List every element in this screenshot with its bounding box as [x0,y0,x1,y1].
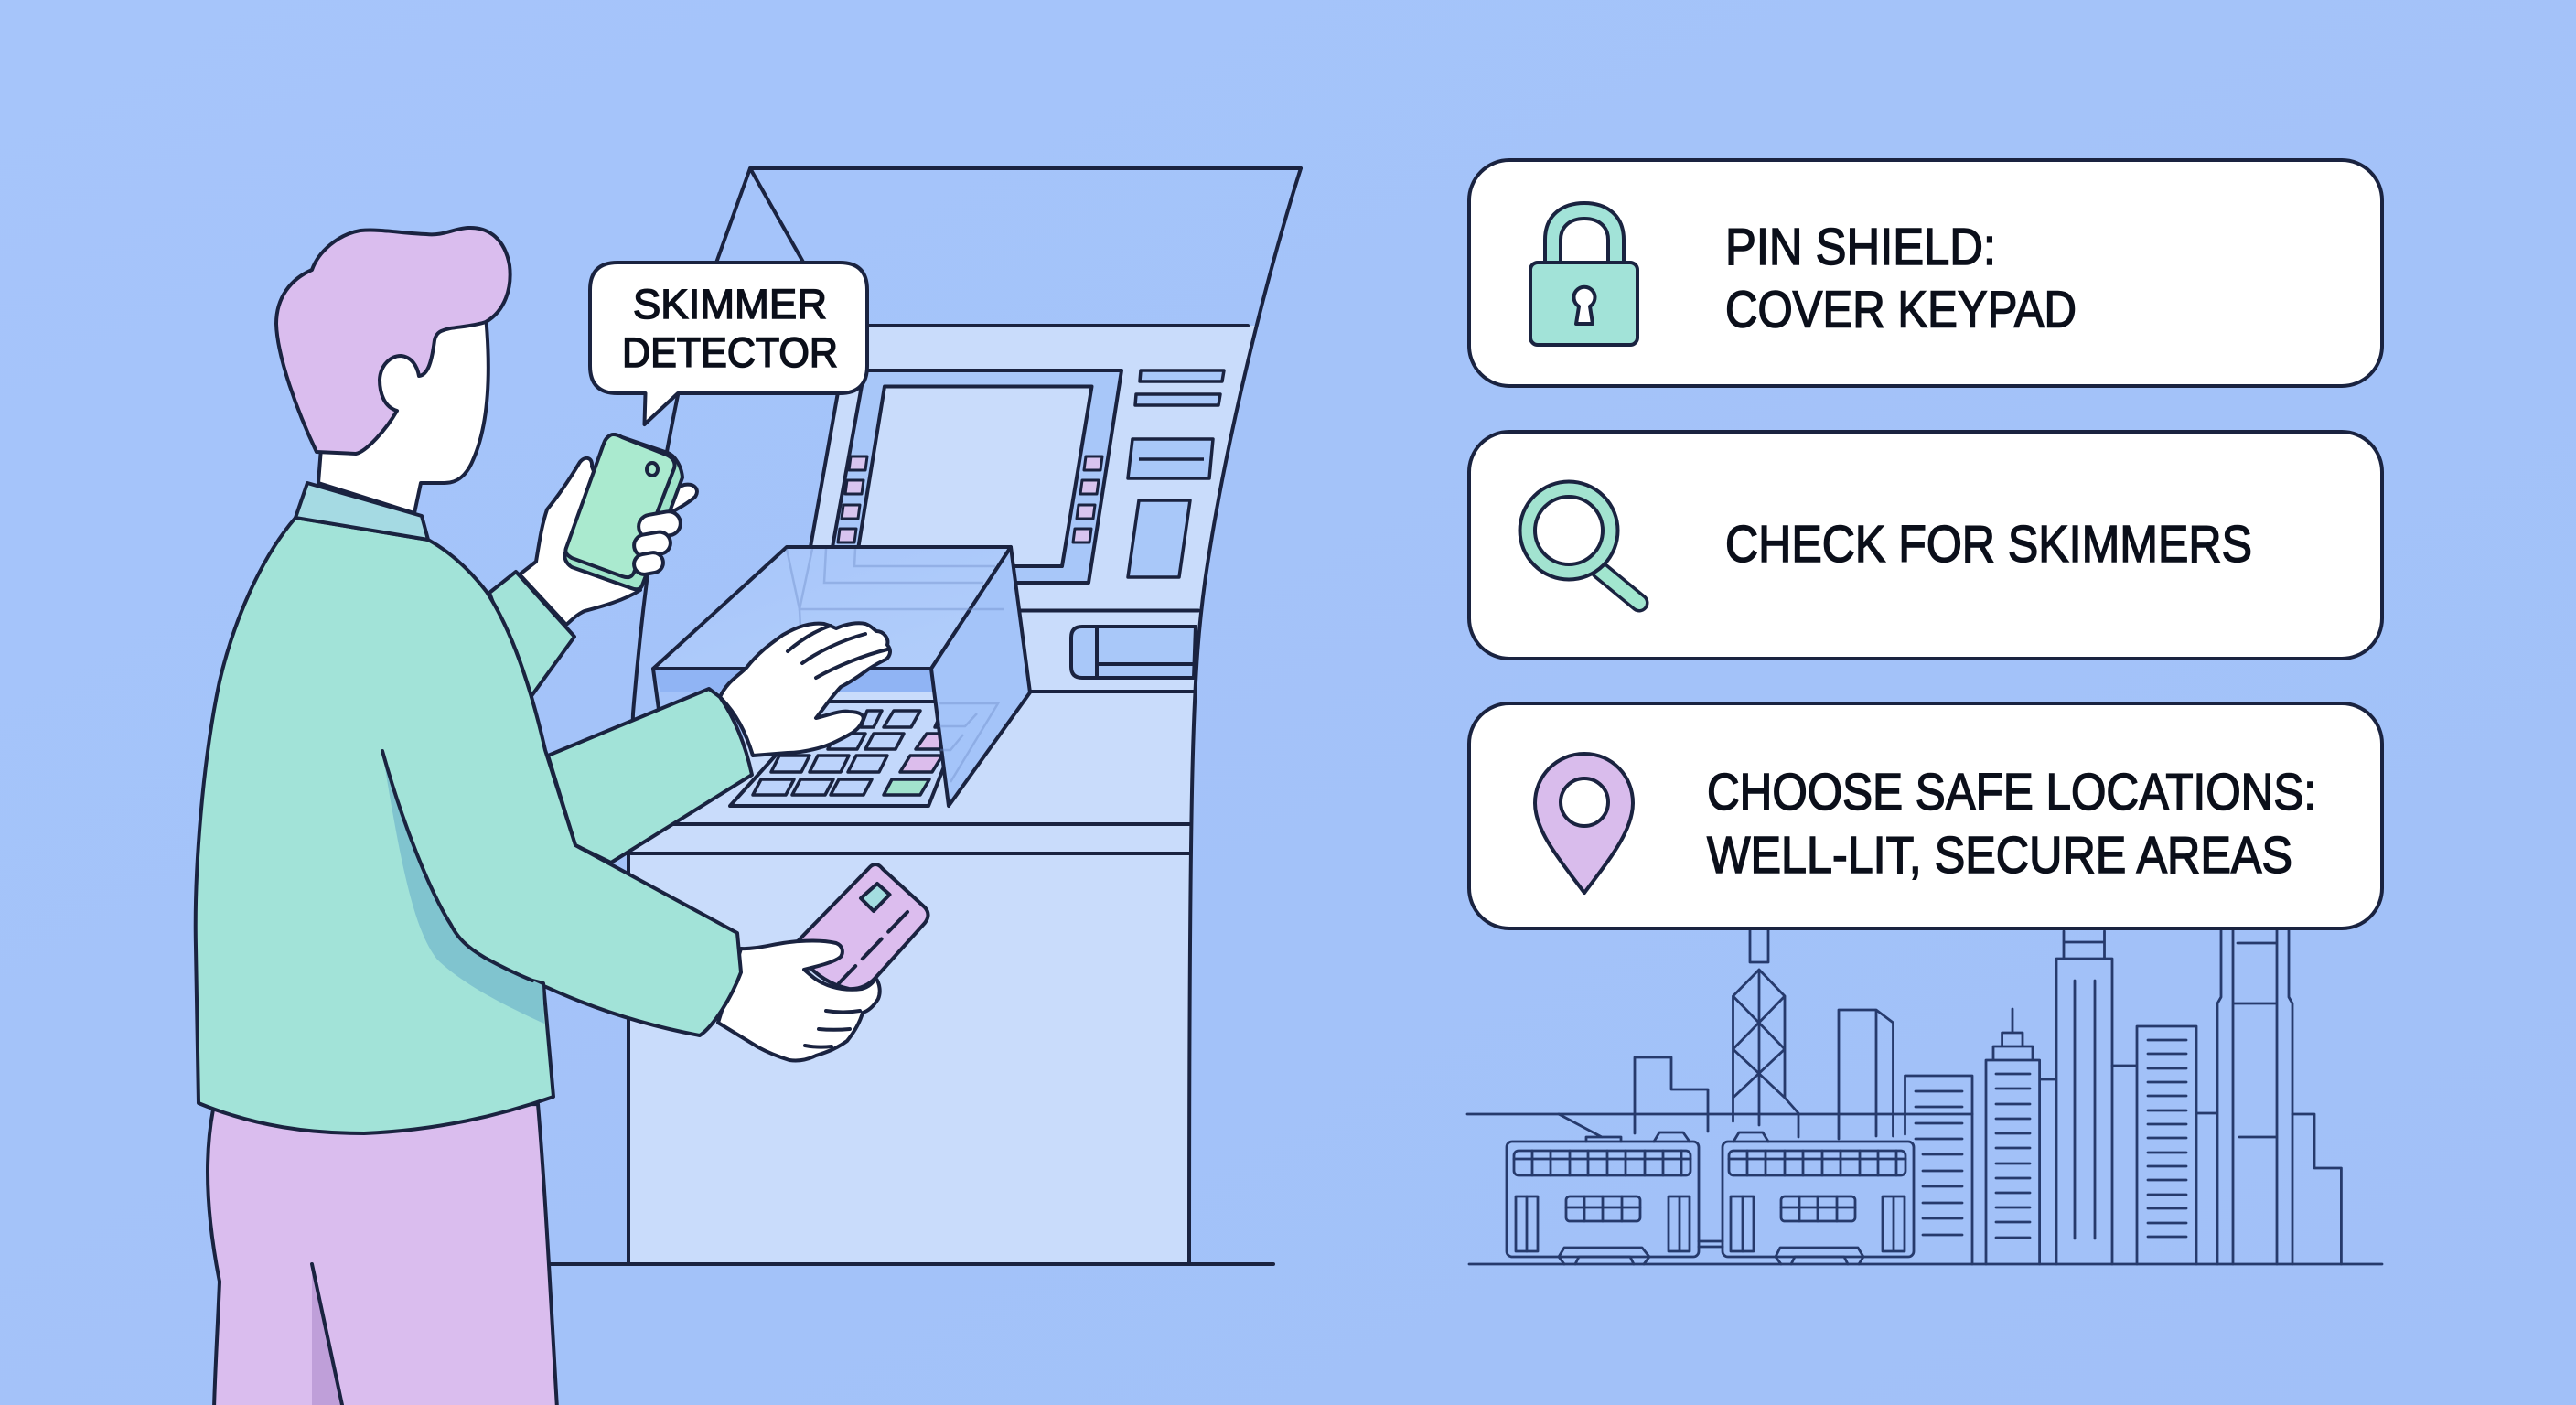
keypad [730,702,970,806]
card and receipt slots [1128,370,1224,577]
skyline [1467,928,2382,1264]
bubble label: SKIMMER [633,281,827,327]
bubble label [622,281,838,376]
text: PIN shield [1725,218,2077,338]
floor line [549,1262,1273,1266]
buildings [1467,928,2382,1264]
phone hand fingers [632,509,682,576]
text: safe locations: WELL-LIT, SECURE AREAS [1707,826,2292,885]
phone [564,434,682,589]
bank card [798,864,928,989]
icon: map pin [1535,754,1633,893]
keypad hand [720,623,890,756]
collar [295,483,428,540]
ATM machine [549,168,1301,1264]
ATM screen [826,370,1122,583]
hair [276,228,510,454]
bubble label: DETECTOR [622,329,838,376]
text: check for skimmers: CHECK FOR SKIMMERS [1725,515,2252,574]
card: PIN shield [1469,160,2382,386]
person [196,228,928,1405]
cash dispenser [1071,627,1196,678]
text: safe locations: CHOOSE SAFE LOCATIONS: [1707,763,2316,821]
phone arm sleeve [489,572,574,700]
text: PIN shield: PIN SHIELD: [1725,218,1996,276]
face and neck [318,274,488,513]
phone hand [520,458,697,625]
card: safe locations [1469,703,2382,928]
ATM body [628,168,1301,1263]
card hand [718,941,880,1060]
icon: magnifier [1520,481,1639,603]
PIN shield [653,547,1030,806]
side buttons [838,456,1102,542]
icon: padlock [1530,203,1637,345]
keypad arm sleeve [548,689,752,863]
speech bubble [590,263,867,424]
text: safe locations [1707,763,2316,885]
ATM hood outline [628,168,1301,860]
sweater [196,518,741,1133]
tram 2 [1699,1132,1914,1264]
tram 1 [1507,1114,1699,1264]
card: check for skimmers [1469,432,2382,659]
trousers [208,1104,557,1405]
text: PIN shield: COVER KEYPAD [1725,280,2077,338]
